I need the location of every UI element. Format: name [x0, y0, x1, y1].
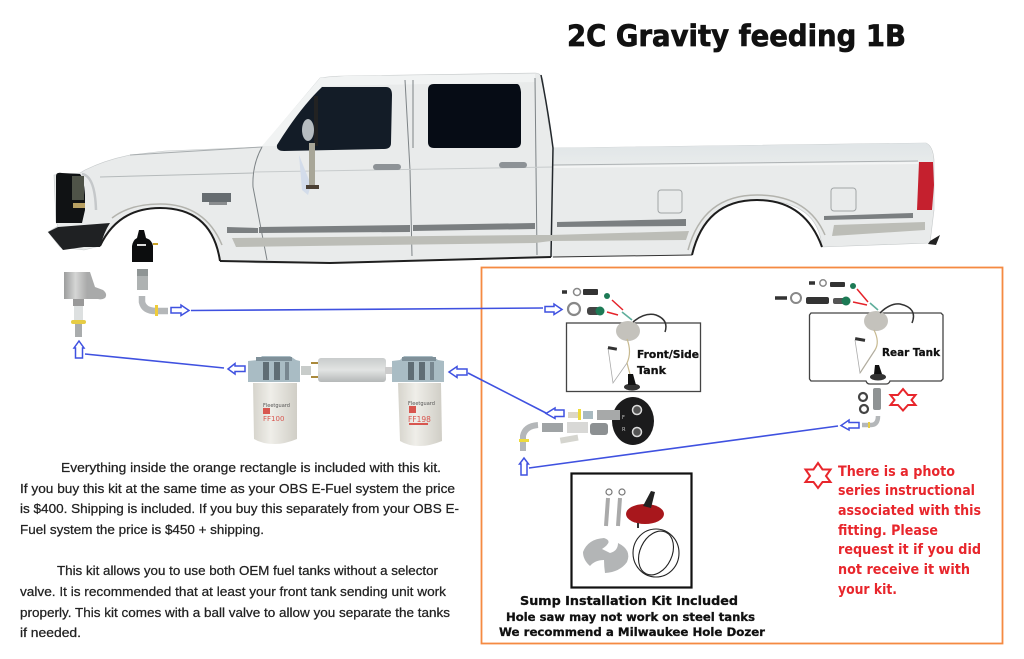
- title: 2C Gravity feeding 1B: [567, 19, 906, 53]
- door handles: [373, 164, 401, 170]
- panel: front side tank: Front/Side: [637, 348, 699, 361]
- panel: front side tank: [562, 288, 700, 392]
- text block: pricing: Everything inside the orange rectangle is included with this kit.: [61, 460, 441, 475]
- line: filter to fitting: [468, 373, 546, 413]
- left filter: [253, 383, 297, 444]
- hoses and clamps: [562, 288, 610, 316]
- text block: kit description: properly. This kit comes with a ball valve to allow you separate the tanks: [20, 605, 451, 620]
- panel: rear tank: [775, 280, 943, 428]
- text block: pricing: If you buy this kit at the same time as your OBS E-Fuel system the price: [20, 481, 455, 496]
- flange: [583, 538, 628, 573]
- cab pillars and roof: [262, 74, 535, 146]
- diagram: filter and pump assembly: Fleetguard: [263, 403, 290, 409]
- callout: red star note: your kit.: [838, 582, 897, 598]
- text block: pricing: Fuel system the price is $450 + shipping.: [20, 522, 264, 537]
- front bumper: [48, 223, 110, 250]
- caption: sump kit: We recommend a Milwaukee Hole Dozer: [499, 625, 765, 639]
- panel: sump installation kit: [572, 474, 692, 588]
- callout: red star note: There is a photo: [838, 464, 955, 480]
- fuel doors: [658, 190, 682, 213]
- caption: sump kit: Hole saw may not work on steel tanks: [506, 610, 755, 624]
- line: filter to block: [85, 354, 224, 368]
- F-150 badge: [202, 193, 231, 202]
- text block: pricing: is $400. Shipping is included. If you buy this separately from your OBS E-: [20, 501, 459, 516]
- bolts: [606, 489, 625, 526]
- diagram: distribution plate and ball valve: [519, 397, 654, 451]
- right filter head: [392, 356, 444, 382]
- callout: red star note: series instructional: [838, 483, 975, 499]
- diagram: distribution plate and ball valve: F: [622, 415, 625, 421]
- callout: red star note: request it if you did: [838, 542, 981, 558]
- diagram: filter and pump assembly: Fleetguard: [408, 401, 435, 407]
- line: regulator to front tank: [191, 308, 543, 310]
- o-rings: [632, 525, 680, 581]
- door seams: [253, 78, 537, 260]
- rear wheel arch trim: [692, 200, 822, 255]
- icon: billet distribution block: [64, 272, 106, 337]
- arrow: to regulator fitting: [171, 305, 189, 316]
- panel: front side tank: Tank: [637, 364, 667, 377]
- side trim: [227, 213, 913, 233]
- arrow: into front tank clamp: [545, 304, 562, 314]
- front door window: [277, 87, 392, 151]
- diagram: filter and pump assembly: [248, 356, 444, 446]
- callout: red star note: [806, 463, 981, 598]
- line: rear tank to tee: [529, 426, 838, 468]
- brush guard: [56, 173, 85, 223]
- diagram: distribution plate and ball valve: R: [622, 427, 626, 433]
- diagram: filter and pump assembly: FF198: [408, 415, 431, 424]
- rear door window: [428, 84, 521, 148]
- arrow: into right filter: [449, 366, 467, 378]
- mirror: [299, 96, 319, 195]
- arrow: from block outlet: [546, 408, 564, 418]
- tail light: [917, 162, 934, 210]
- hoses and clamps: [775, 280, 856, 306]
- front wheel arch trim: [100, 208, 220, 261]
- panel: rear tank: Rear Tank: [882, 346, 941, 359]
- diagram: filter and pump assembly: FF100: [263, 415, 284, 423]
- text block: kit description: valve. It is recommended that at least your front tank sending unit work: [20, 584, 447, 599]
- bulkhead fittings: [859, 388, 881, 428]
- text block: kit description: [20, 563, 451, 640]
- text block: pricing: [20, 460, 459, 537]
- sending unit: [853, 289, 914, 380]
- text block: kit description: if needed.: [20, 625, 81, 640]
- icon: 90 degree hose fitting: [142, 296, 168, 316]
- red sump: [626, 491, 664, 528]
- arrow: left of filter: [228, 364, 245, 374]
- pump: [301, 366, 311, 375]
- callout: red star note: not receive it with: [838, 562, 970, 578]
- arrow: up to elbow: [520, 458, 528, 475]
- arrow: from rear fitting: [841, 420, 859, 430]
- caption: sump kit: [499, 593, 765, 639]
- caption: sump kit: Sump Installation Kit Included: [520, 593, 738, 608]
- icon: fuel pressure regulator: [132, 230, 158, 290]
- truck illustration: [48, 73, 940, 263]
- arrow: up into block: [74, 341, 84, 358]
- callout: red star note: associated with this: [838, 503, 981, 519]
- orange rectangle: [482, 268, 1002, 644]
- right filter: [398, 383, 442, 446]
- icon: red six-pointed star marker: [890, 389, 916, 410]
- hood line: [100, 173, 253, 177]
- left filter head: [248, 356, 300, 382]
- sending unit: [607, 300, 666, 390]
- callout: red star note: fitting. Please: [838, 523, 938, 539]
- text block: kit description: This kit allows you to use both OEM fuel tanks without a selector: [57, 563, 439, 578]
- bed top panel: [553, 143, 933, 166]
